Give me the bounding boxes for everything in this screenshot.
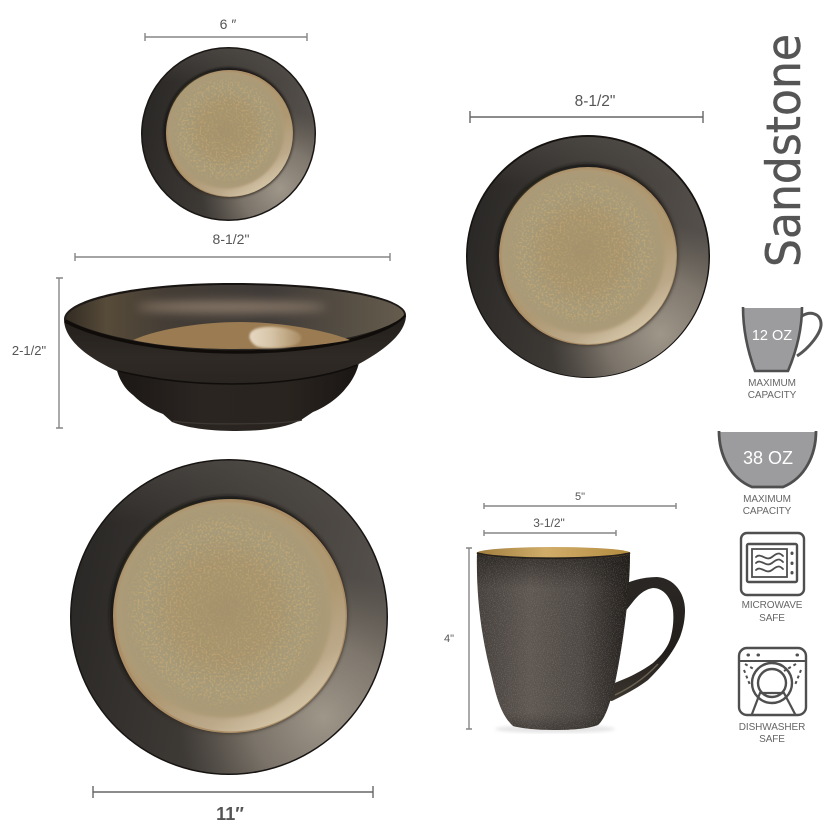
label: dishwasher safe: DISHWASHER xyxy=(739,722,805,733)
medium plate xyxy=(466,135,710,378)
dimension: bowl height xyxy=(12,278,63,428)
label: mug maximum capacity: MAXIMUM xyxy=(748,378,796,389)
icon: mug capacity 12 oz xyxy=(743,307,821,372)
dimension: large plate width: 11″ xyxy=(216,804,244,824)
dimension: mug width with handle: 5" xyxy=(575,491,585,503)
title: Sandstone: Sandstone xyxy=(757,34,812,267)
dimension: medium plate width xyxy=(470,93,703,123)
dimension: small plate width: 6 ″ xyxy=(220,16,236,32)
label: bowl maximum capacity: CAPACITY xyxy=(743,506,792,517)
dimension: mug height xyxy=(444,548,472,729)
dimension: mug height: 4" xyxy=(444,633,454,645)
label: bowl maximum capacity: MAXIMUM xyxy=(743,494,791,505)
dimension: mug diameter: 3-1/2" xyxy=(533,516,565,530)
dimension: medium plate width: 8-1/2" xyxy=(575,93,615,110)
dimension: large plate width xyxy=(93,786,373,824)
icon: bowl capacity 38 oz: 38 OZ xyxy=(743,448,793,468)
dimension: small plate width xyxy=(145,16,307,41)
dimension: bowl height: 2-1/2" xyxy=(12,343,47,358)
mug xyxy=(476,547,685,733)
label: microwave safe: MICROWAVE xyxy=(742,600,803,611)
label: microwave safe: SAFE xyxy=(759,613,785,624)
bowl xyxy=(64,283,406,431)
dimension: bowl width xyxy=(75,231,390,261)
label: dishwasher safe: SAFE xyxy=(759,734,785,745)
icon: dishwasher xyxy=(739,648,806,715)
icon: microwave xyxy=(741,533,804,595)
large plate xyxy=(70,459,388,775)
icon: mug capacity 12 oz: 12 OZ xyxy=(752,328,792,344)
dimension: bowl width: 8-1/2" xyxy=(213,231,249,247)
dimension: mug width with handle xyxy=(484,491,676,509)
icon: bowl capacity 38 oz xyxy=(719,431,816,487)
label: mug maximum capacity: CAPACITY xyxy=(748,390,797,401)
dimension: mug diameter xyxy=(484,516,616,536)
small plate xyxy=(141,47,316,221)
